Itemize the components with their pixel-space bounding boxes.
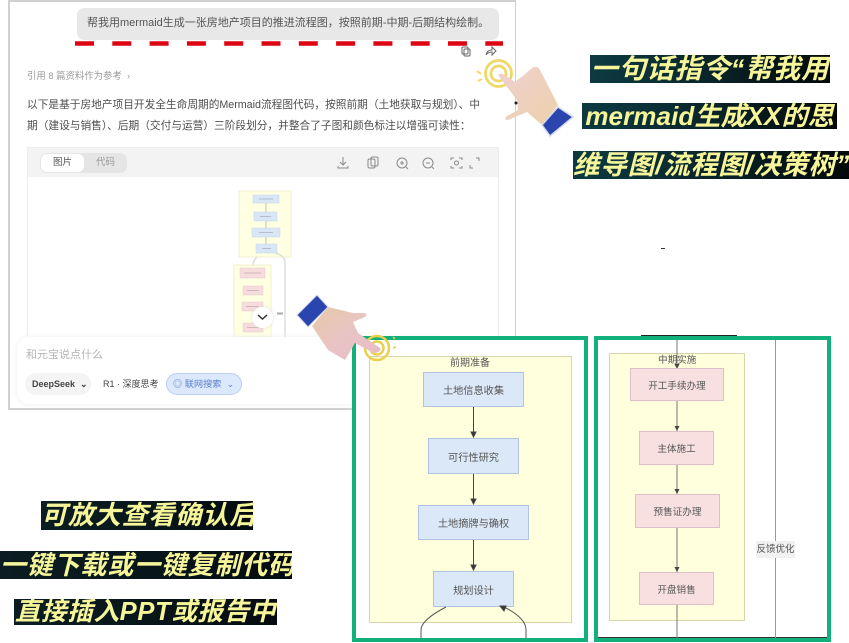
active tab: 图片 — [53, 157, 72, 168]
input placeholder: 和元宝说点什么 — [26, 349, 103, 361]
arrows — [420, 407, 526, 638]
mini flowchart thumbnail — [234, 190, 292, 337]
flow lines — [674, 340, 776, 638]
step: land auction: 土地摘牌与确权 — [438, 519, 509, 530]
step: planning: 规划设计 — [453, 586, 494, 596]
step: presale permit — [635, 494, 720, 528]
model selector — [25, 373, 91, 395]
caption: instruction text — [573, 55, 849, 179]
step: opening sale — [639, 572, 714, 605]
panel: mid phase flowchart — [594, 336, 831, 642]
step: presale permit: 预售证办理 — [654, 507, 701, 518]
answer paragraph: 期（建设与销售）、后期（交付与运营）三阶段划分，并整合了子图和颜色标注以增强可读性： — [27, 120, 471, 132]
phase title: 中期实施 — [658, 355, 696, 366]
early phase container — [369, 356, 572, 623]
step: planning — [433, 571, 514, 607]
answer paragraph: 以下是基于房地产项目开发全生命周期的Mermaid流程图代码，按照前期（土地获取与规划）、中 — [27, 99, 480, 111]
icon: pointing hand top — [476, 59, 574, 137]
step: land auction — [418, 505, 529, 540]
panel: early phase flowchart — [352, 336, 588, 642]
mid phase container — [609, 353, 745, 621]
scroll down button — [252, 307, 273, 328]
step: land info — [423, 372, 524, 407]
step: land info: 土地信息收集 — [443, 386, 504, 397]
thinking mode selector: R1 · 深度思考 — [103, 379, 159, 389]
feedback label: 反馈优化 — [756, 544, 794, 555]
web search toggle: ◎ 联网搜索 ⌄ — [173, 379, 234, 389]
prompt action icons — [462, 46, 497, 56]
web search toggle — [166, 373, 242, 395]
tab switcher — [40, 153, 127, 173]
user prompt bubble — [77, 8, 499, 40]
icon: pointing hand bottom — [296, 294, 396, 362]
code tab: 代码 — [96, 157, 115, 168]
active tab — [41, 154, 84, 172]
diagram card — [27, 147, 499, 337]
red dashed divider — [75, 41, 503, 46]
model selector: DeepSeek ⌄ — [32, 379, 88, 389]
panel: chat window — [8, 0, 516, 410]
phase title: 前期准备 — [450, 358, 490, 369]
reference count link: 引用 8 篇资料作为参考 › — [27, 70, 130, 81]
small tick mark — [661, 248, 665, 249]
step: feasibility — [428, 438, 519, 474]
bottom black edge — [598, 637, 827, 638]
toolbar icons — [338, 156, 480, 170]
step: permits — [630, 368, 724, 401]
chat input panel — [17, 337, 447, 404]
chevron icon — [258, 314, 268, 320]
caption: download text — [0, 501, 292, 625]
user prompt bubble: 帮我用mermaid生成一张房地产项目的推进流程图，按照前期-中期-后期结构绘制。 — [87, 17, 489, 29]
feedback label — [756, 541, 795, 558]
step: construction: 主体施工 — [657, 444, 696, 455]
black top edge — [641, 335, 737, 336]
answer paragraph — [27, 98, 480, 132]
step: construction — [639, 431, 714, 465]
step: opening sale: 开盘销售 — [657, 584, 696, 596]
step: permits: 开工手续办理 — [648, 380, 706, 392]
card toolbar — [28, 148, 498, 177]
step: feasibility: 可行性研究 — [448, 452, 499, 464]
